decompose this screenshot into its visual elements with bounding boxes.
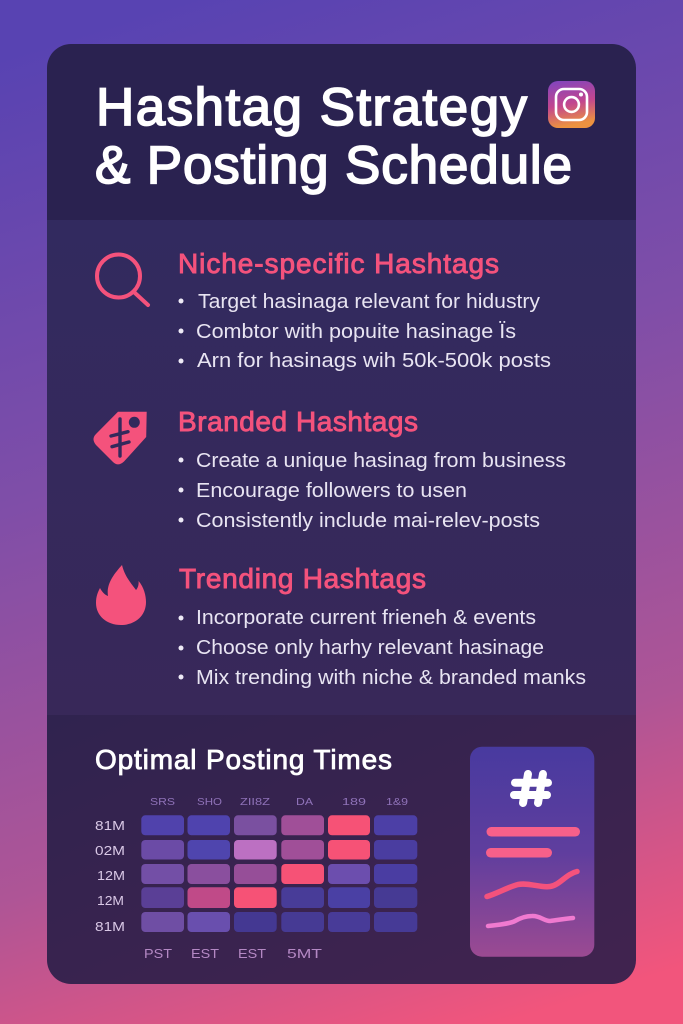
- timezone labels: [144, 947, 323, 961]
- bullet list: branded: Encourage followers to usen: [196, 480, 467, 502]
- title: & Posting Schedule: [95, 136, 572, 195]
- panel: hashtag types: [47, 220, 636, 715]
- heading: trending: Trending Hashtags: [179, 563, 426, 594]
- section: trending hashtags: [96, 563, 586, 689]
- column labels: SHO: [197, 796, 222, 808]
- row labels: 02M: [95, 844, 125, 858]
- column labels: [150, 796, 408, 808]
- section: branded hashtags: [94, 406, 566, 532]
- column labels: 189: [342, 796, 366, 808]
- bullet list: trending: [178, 607, 586, 689]
- row labels: [95, 819, 125, 934]
- panel: main card: [47, 44, 636, 984]
- line: pink trend: [488, 916, 573, 926]
- icon: magnifying glass: [97, 254, 148, 305]
- row labels: 81M: [95, 819, 125, 833]
- title: Hashtag Strategy: [96, 78, 528, 137]
- bullet list: trending: Mix trending with niche & branded manks: [196, 667, 586, 689]
- bullet list: branded: [178, 450, 566, 532]
- heatmap chart: [95, 796, 417, 961]
- icon: hashtag price tag: [94, 412, 147, 464]
- heatmap cells: [141, 815, 417, 932]
- bar: short: [486, 848, 552, 858]
- icon: instagram logo: [548, 81, 595, 128]
- heading: branded: Branded Hashtags: [178, 406, 418, 437]
- timezone labels: PST: [144, 947, 172, 961]
- bullet list: trending: Incorporate current frieneh & events: [196, 607, 536, 629]
- panel: phone card illustration: [470, 747, 594, 957]
- column labels: 1&9: [386, 796, 408, 808]
- icon: hash symbol: [514, 774, 548, 803]
- title: [95, 78, 572, 195]
- timezone labels: EST: [191, 947, 219, 961]
- heading: niche-specific: Niche-specific Hashtags: [178, 248, 499, 279]
- row labels: 12M: [97, 869, 125, 883]
- bullet list: niche-specific: Combtor with popuite hasinage Ïs: [196, 321, 516, 343]
- timezone labels: EST: [238, 947, 266, 961]
- column labels: ZII8Z: [240, 796, 271, 808]
- bullet list: niche-specific: Arn for hasinags wih 50k-500k posts: [197, 350, 551, 372]
- panel: posting times band: [47, 715, 636, 984]
- timezone labels: 5MT: [287, 947, 323, 961]
- bar: long: [486, 827, 580, 836]
- line: red trend: [487, 872, 577, 896]
- bullet list: niche-specific: Target hasinaga relevant for hidustry: [198, 291, 540, 313]
- bullet list: branded: Create a unique hasinag from business: [196, 450, 566, 472]
- column labels: DA: [296, 796, 313, 808]
- heading: optimal posting times: Optimal Posting Times: [95, 744, 392, 775]
- bullet list: niche-specific: [178, 291, 551, 372]
- column labels: SRS: [150, 796, 175, 808]
- icon: flame: [96, 565, 146, 625]
- bullet list: branded: Consistently include mai-relev-posts: [196, 510, 540, 532]
- row labels: 81M: [95, 920, 125, 934]
- section: niche-specific hashtags: [97, 248, 551, 372]
- panel: header band: [47, 44, 636, 220]
- bullet list: trending: Choose only harhy relevant hasinage: [196, 637, 544, 659]
- row labels: 12M: [97, 894, 124, 908]
